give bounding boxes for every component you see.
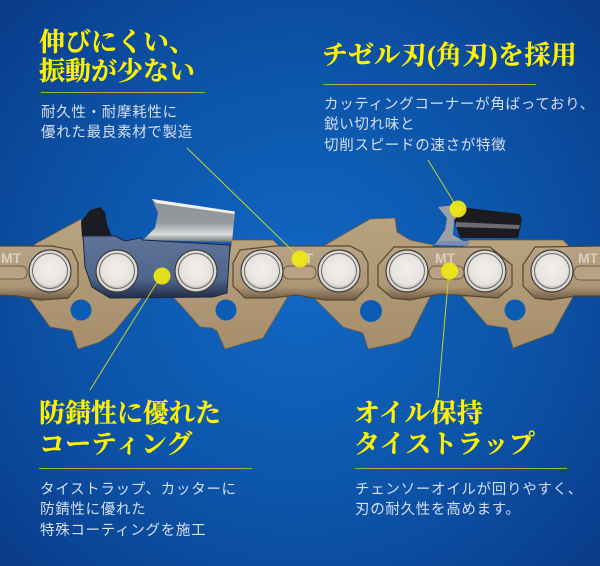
text: chisel cutter: カッティングコーナーが角ばっており、 xyxy=(324,97,595,113)
text: chisel cutter: 切削スピードの速さが特徴 xyxy=(324,138,506,154)
heading: stretch resistance xyxy=(39,28,195,86)
side strap band xyxy=(0,246,600,300)
cutter left xyxy=(81,199,235,298)
depth tooth highlight xyxy=(433,241,470,246)
drive links xyxy=(27,218,573,349)
heading: oil strap xyxy=(354,399,535,458)
heading: rust coating: コーティング xyxy=(39,430,192,458)
text: oil strap: チェンソーオイルが回りやすく、 xyxy=(355,482,583,498)
text: oil strap xyxy=(355,481,583,518)
heading: oil strap: オイル保持 xyxy=(354,399,483,428)
MT stamps: MT xyxy=(293,250,314,266)
text: rust coating: 防錆性に優れた xyxy=(40,502,146,518)
leader lines xyxy=(90,148,458,398)
link holes xyxy=(70,300,526,322)
text: stretch resistance xyxy=(41,104,193,141)
text: chisel cutter: 鋭い切れ味と xyxy=(324,117,415,133)
marker dots xyxy=(154,200,466,284)
MT stamps: MT xyxy=(435,250,456,266)
text: chisel cutter xyxy=(324,96,595,154)
cutter right xyxy=(435,205,522,245)
MT stamps: MT xyxy=(1,250,22,266)
text: rust coating: 特殊コーティングを施工 xyxy=(40,523,206,539)
heading: rust coating: 防錆性に優れた xyxy=(39,399,221,428)
MT stamps xyxy=(1,250,599,266)
heading: stretch resistance: 伸びにくい、 xyxy=(39,28,195,57)
text: rust coating: タイストラップ、カッターに xyxy=(40,482,237,498)
heading: stretch resistance: 振動が少ない xyxy=(39,57,195,86)
heading: oil strap: タイストラップ xyxy=(354,430,535,458)
text: stretch resistance: 優れた最良素材で製造 xyxy=(41,125,193,141)
centre slots xyxy=(0,266,600,280)
rivets xyxy=(29,250,573,292)
heading: rust coating xyxy=(39,399,221,458)
text: stretch resistance: 耐久性・耐摩耗性に xyxy=(41,105,178,121)
text: oil strap: 刃の耐久性を高めます。 xyxy=(355,502,521,518)
MT stamps: MT xyxy=(578,250,599,266)
heading: chisel cutter: チゼル刃(角刃)を採用 xyxy=(322,41,577,70)
text: rust coating xyxy=(40,482,237,539)
